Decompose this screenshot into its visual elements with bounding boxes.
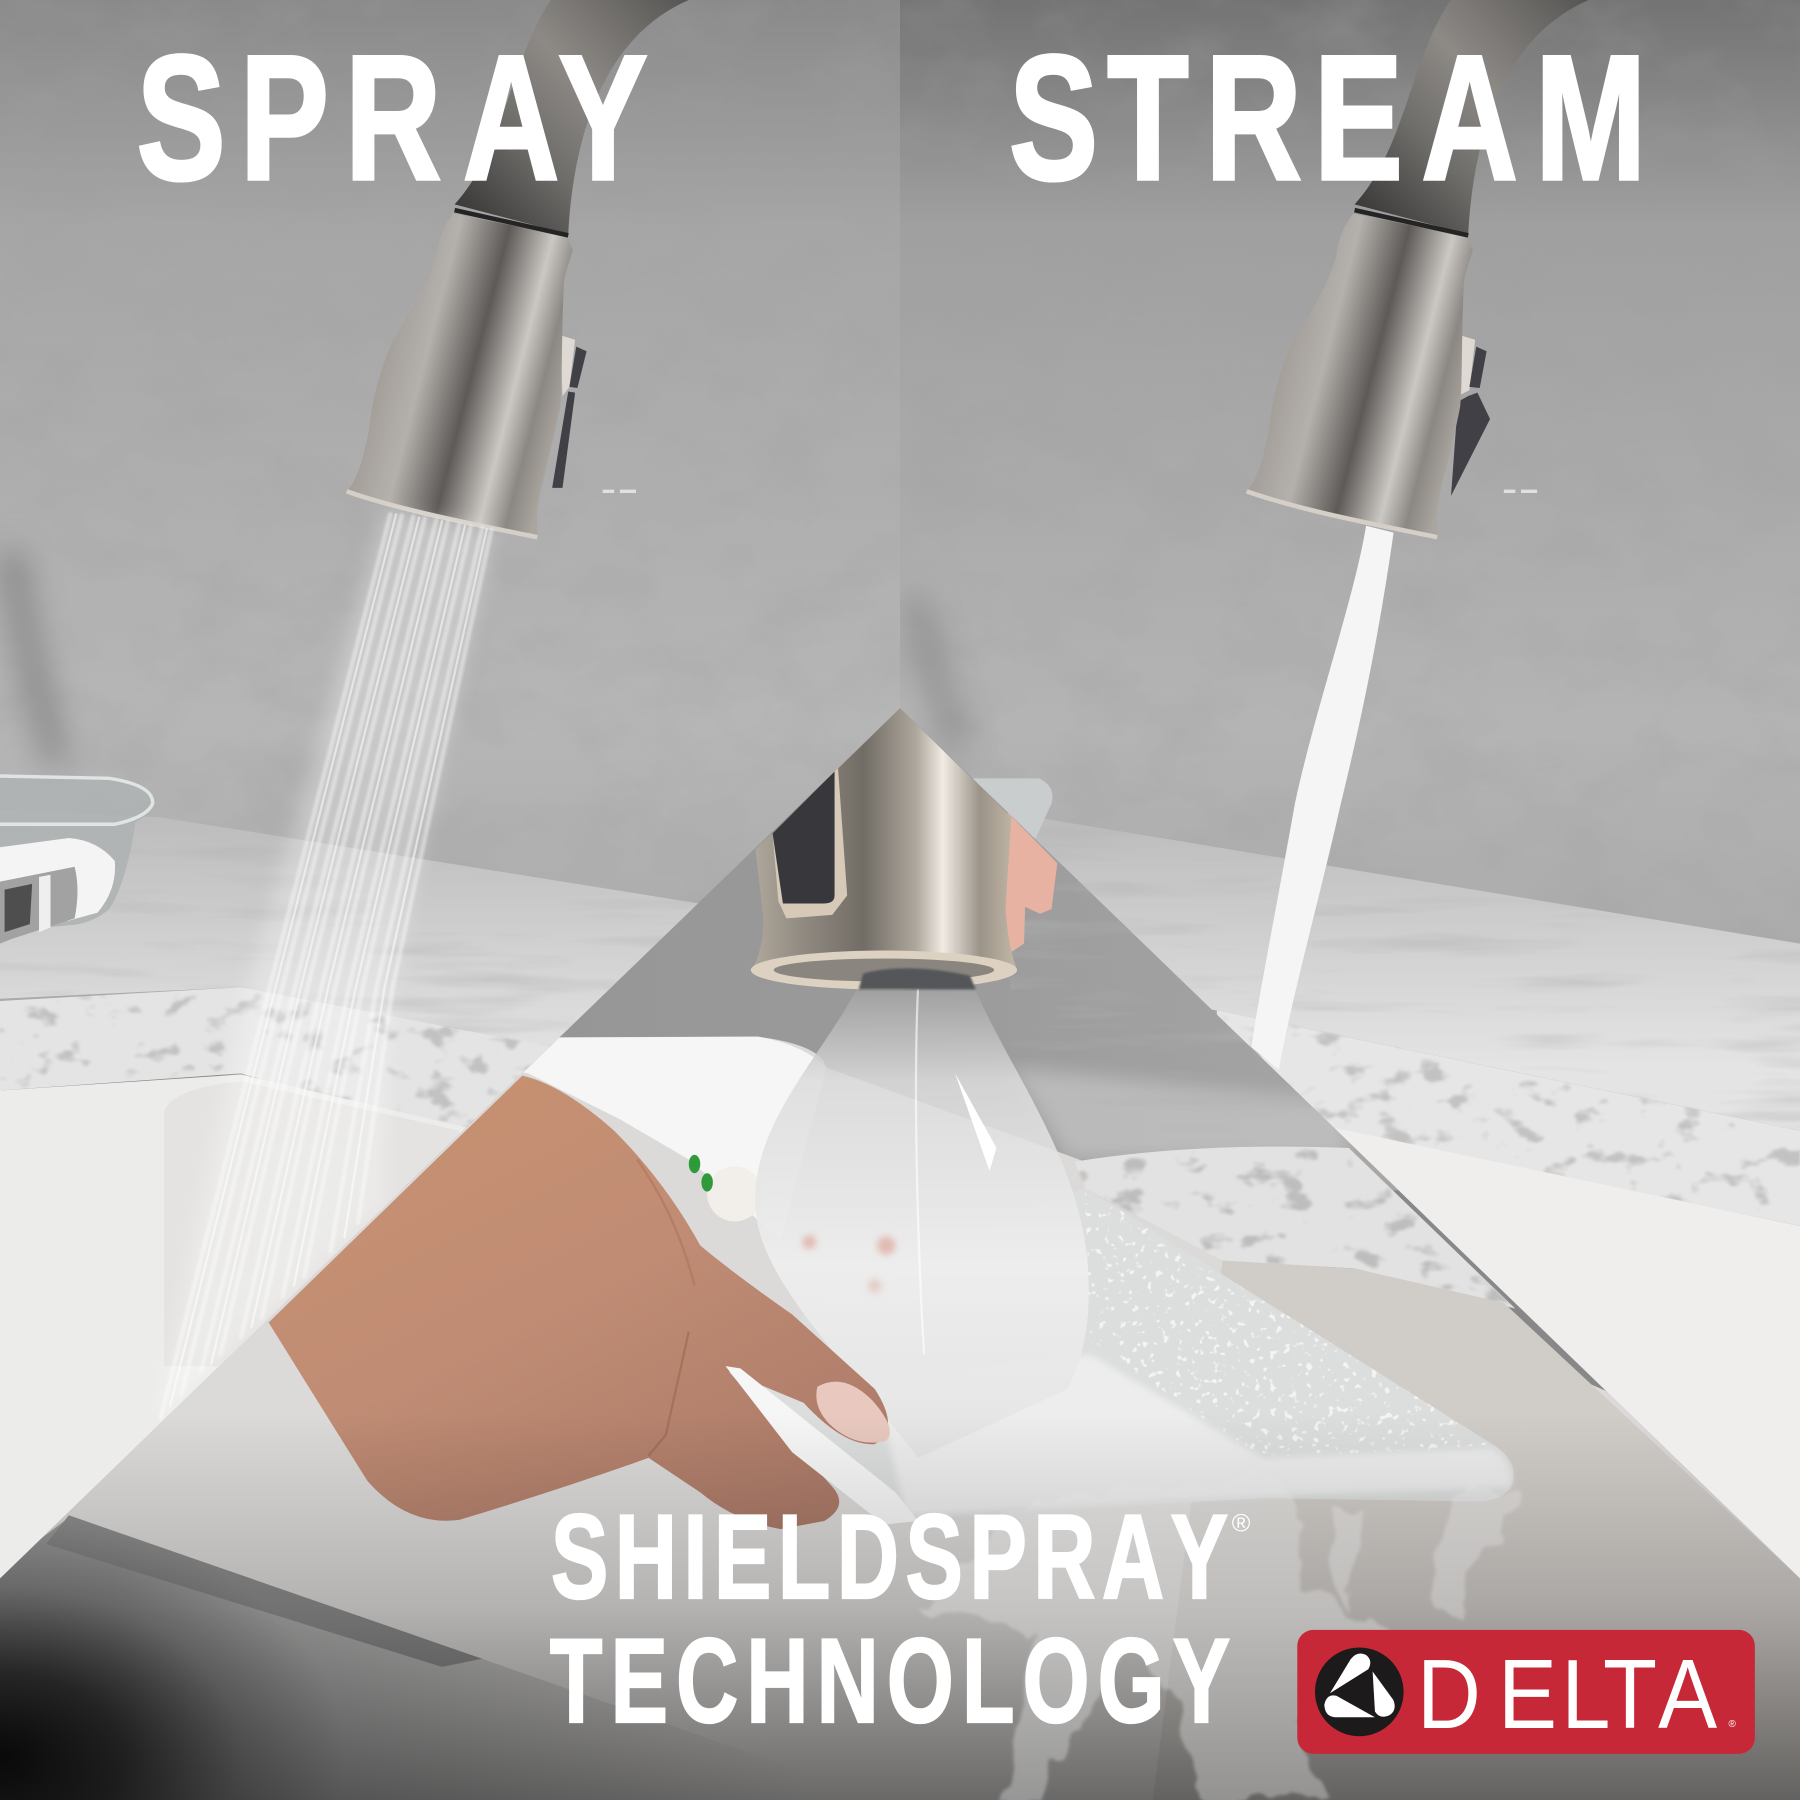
- bottom shading: [0, 1412, 1800, 1800]
- counter edge: [1217, 1010, 1800, 1226]
- fingernail: [816, 1382, 890, 1443]
- heading: shieldspray technology: TECHNOLOGY: [550, 1615, 1230, 1748]
- backdrop: [406, 736, 1398, 1190]
- countertop: [987, 809, 1800, 1131]
- wall: [0, 0, 900, 1033]
- sink: [1332, 1127, 1800, 1607]
- reflection: [603, 490, 636, 493]
- panel: spray: [0, 0, 900, 1800]
- hand: [269, 1076, 890, 1529]
- heading: spray: SPRAY: [137, 20, 647, 218]
- stream water: [1251, 526, 1394, 1070]
- plate edge: [726, 1366, 918, 1524]
- reflection: [1504, 490, 1537, 493]
- logo: delta: [1297, 1630, 1755, 1754]
- counter edge: [1074, 1147, 1515, 1309]
- sink lip: [46, 1515, 482, 1667]
- sprayer head: [347, 210, 573, 537]
- sprinkles: [689, 1155, 762, 1221]
- sink basin: [0, 1037, 1800, 1800]
- sprayer head: [1247, 210, 1473, 537]
- trigger: [552, 335, 587, 488]
- logo: delta: ®: [1729, 1719, 1737, 1730]
- fingers: [999, 813, 1057, 953]
- logo wordmark: DELTA: [1417, 1639, 1718, 1749]
- heading: shieldspray technology: ®: [1232, 1509, 1251, 1537]
- sprayer body: [752, 708, 1017, 983]
- sink lower wall: [0, 1518, 987, 1800]
- button: [773, 768, 847, 918]
- logo mark: [1315, 1648, 1404, 1736]
- glass bowl: [973, 778, 1052, 839]
- plate: [735, 1188, 1514, 1518]
- wall: [900, 0, 1800, 1033]
- heading: stream: STREAM: [1009, 20, 1646, 218]
- panel: stream: [900, 0, 1800, 1607]
- faucet close-up: [751, 708, 1057, 990]
- heading: shieldspray technology: SHIELDSPRAY: [551, 1491, 1228, 1624]
- counter edge: [0, 987, 551, 1136]
- water bulb: [755, 976, 1089, 1458]
- spray water: [155, 511, 494, 1423]
- panel: shieldspray: [0, 708, 1800, 1800]
- spout: [1355, 0, 1589, 234]
- sink far: [1148, 1260, 1800, 1800]
- spout: [455, 0, 689, 234]
- sink: [0, 1074, 466, 1578]
- trigger: [1451, 335, 1490, 496]
- runoff water: [918, 1475, 1515, 1800]
- nozzle rim: [751, 951, 1017, 990]
- countertop: [0, 816, 698, 1047]
- heading: shieldspray technology: [550, 1491, 1251, 1748]
- glass bowl: [0, 776, 153, 944]
